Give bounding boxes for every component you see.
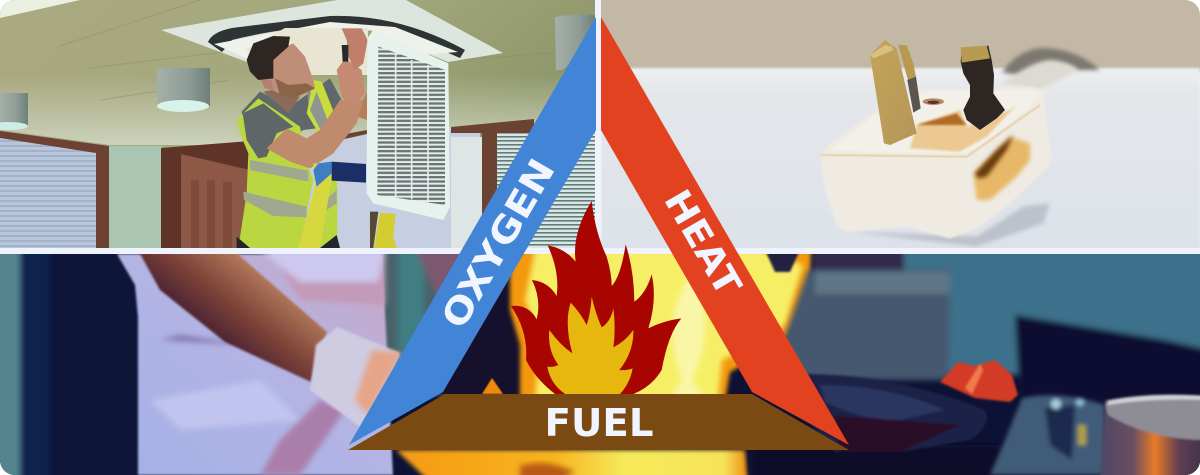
ceiling lights — [0, 14, 596, 130]
windows behind — [306, 119, 595, 248]
outer flame — [511, 201, 681, 394]
photo panel: burnt electrical plug — [601, 0, 1200, 253]
head — [263, 90, 300, 113]
air conditioner cassette — [161, 0, 503, 75]
dark wok area — [440, 354, 466, 394]
arm and hands — [358, 92, 367, 120]
heat side — [601, 17, 849, 445]
right kitchen background — [750, 245, 1200, 475]
chef arm — [138, 250, 327, 382]
window left — [0, 131, 109, 248]
oxygen label: OXYGEN — [434, 152, 564, 336]
peach glow on glove — [355, 350, 402, 415]
ventilation grille — [367, 30, 450, 220]
fuel label: FUEL — [544, 401, 654, 445]
plug — [820, 40, 1052, 247]
brass pins — [870, 40, 921, 145]
frying pan — [790, 374, 987, 452]
shirt — [242, 78, 342, 132]
apron folds — [150, 250, 385, 475]
technician — [237, 28, 450, 248]
oxygen side — [349, 17, 596, 445]
wall — [109, 146, 162, 248]
ladder — [298, 163, 333, 248]
left dark background — [0, 254, 52, 475]
glass bowl — [990, 395, 1105, 475]
fuel side — [348, 394, 849, 450]
door — [161, 141, 250, 248]
burnt pin — [961, 46, 1005, 130]
inner flame — [547, 297, 633, 394]
photo panel: technician servicing a ceiling air conditioner — [0, 0, 597, 248]
flames behind the triangle — [396, 250, 812, 475]
gutter background — [0, 0, 1200, 254]
heat label: HEAT — [655, 183, 749, 303]
photo panel: chef flambeing in a kitchen — [0, 240, 1200, 475]
plug shadow — [850, 203, 1050, 247]
flame icon — [511, 201, 681, 394]
fire triangle — [348, 17, 849, 450]
plug body — [820, 87, 1052, 238]
saucepan — [1100, 395, 1200, 475]
blurred background behind the arm — [382, 254, 460, 398]
dark notch in flames — [765, 250, 800, 272]
glove — [310, 327, 400, 430]
burn marks — [820, 98, 1040, 200]
tomatoes — [940, 360, 1018, 402]
chef apron — [117, 254, 393, 475]
safety vest — [237, 98, 313, 248]
